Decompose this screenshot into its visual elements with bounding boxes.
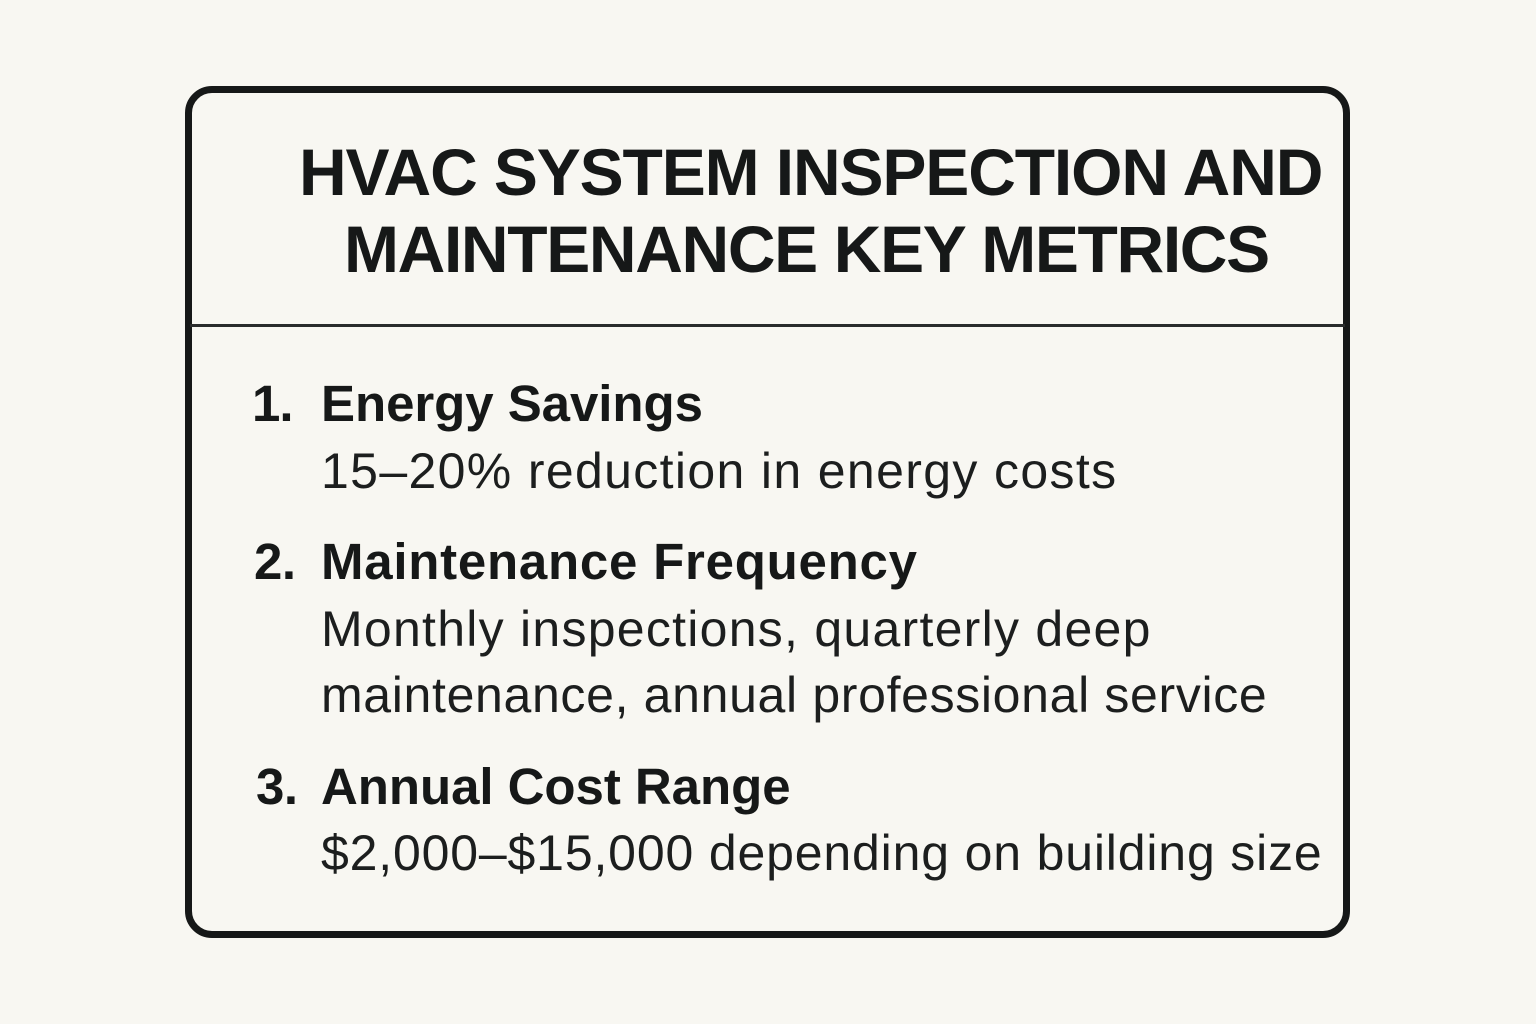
metric 3: annual cost range: 3.: [256, 758, 298, 815]
metric 1: energy savings: 1.: [252, 375, 293, 432]
metric 2: maintenance frequency: maintenance, annual professional service: [321, 667, 1267, 723]
metric 3: annual cost range: [256, 758, 1323, 881]
panel: key metrics card: [185, 86, 1350, 938]
metric 1: energy savings: 15–20% reduction in energy costs: [321, 443, 1117, 499]
metric 3: annual cost range: $2,000–$15,000 depending on building size: [321, 825, 1323, 881]
metric 1: energy savings: Energy Savings: [321, 375, 703, 432]
metric 2: maintenance frequency: [254, 533, 1267, 723]
divider line: [190, 324, 1345, 327]
title: HVAC SYSTEM INSPECTION AND: [299, 135, 1322, 209]
metric 2: maintenance frequency: 2.: [254, 533, 296, 590]
metric 1: energy savings: [252, 375, 1117, 499]
title: [299, 135, 1322, 286]
metric 2: maintenance frequency: Monthly inspections, quarterly deep: [321, 601, 1152, 657]
metric 2: maintenance frequency: Maintenance Frequency: [321, 533, 918, 590]
metric 3: annual cost range: Annual Cost Range: [321, 758, 791, 815]
title: MAINTENANCE KEY METRICS: [344, 212, 1269, 286]
